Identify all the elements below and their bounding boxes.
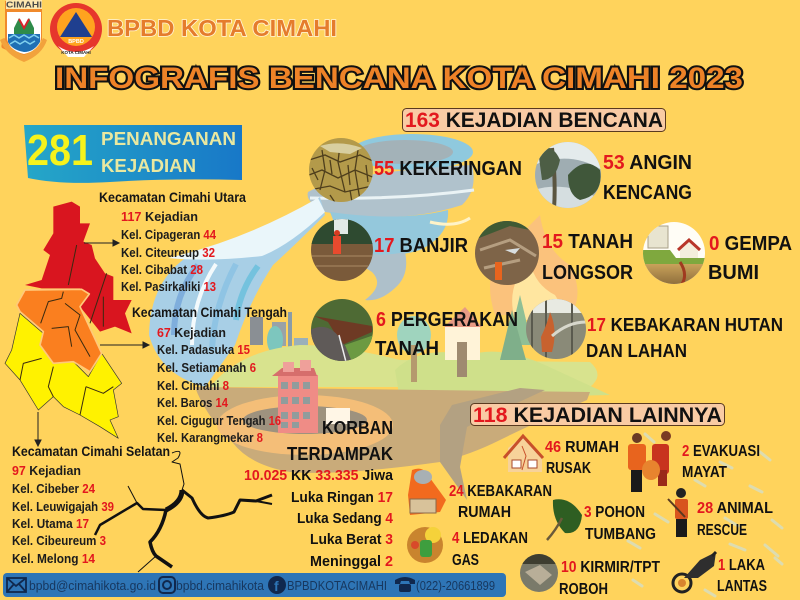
contact: phone: (022)-20661899: [416, 578, 495, 593]
label: gempa bumi: BUMI: [708, 262, 759, 284]
logo: BPBD: [50, 3, 102, 57]
text block: Kecamatan Cimahi Tengah: Kel. Baros 14: [157, 396, 228, 410]
panel: 281 penanganan kejadian: KEJADIAN: [101, 156, 196, 176]
label: ledakan gas: GAS: [452, 552, 479, 569]
district: Cimahi Selatan: [5, 313, 122, 438]
label: tanah longsor: 15 TANAH: [542, 231, 633, 253]
contact: email: bpbd@cimahikota.go.id: [29, 578, 156, 593]
label: ledakan gas: 4 LEDAKAN: [452, 530, 528, 547]
text block: Kecamatan Cimahi Tengah: 67 Kejadian: [157, 326, 226, 340]
photo: kebakaran hutan: [526, 299, 586, 359]
label: rumah rusak: 46 RUMAH: [545, 439, 619, 456]
label: tanah longsor: [542, 231, 633, 284]
logo: Kota Cimahi: CIMAHI: [6, 0, 42, 10]
label: kirmir TPT roboh: [559, 559, 660, 598]
background illustration: city and hills: [210, 307, 610, 400]
label: animal rescue: RESCUE: [697, 522, 747, 539]
district: Cimahi Tengah: [17, 289, 102, 372]
label: kebakaran hutan dan lahan: [586, 315, 783, 361]
label: rumah rusak: RUSAK: [546, 460, 592, 477]
panel: 281 penanganan kejadian: [24, 125, 242, 183]
heading: 163 kejadian bencana: 163 KEJADIAN BENCANA: [405, 109, 663, 132]
label: angin kencang: 53 ANGIN: [603, 152, 692, 174]
text block: Kecamatan Cimahi Tengah: Kecamatan Cimahi Tengah: [132, 305, 287, 320]
text block: Kecamatan Cimahi Tengah: Kel. Cigugur Tengah 16: [157, 414, 281, 428]
logo: BPBD: BPBD: [68, 39, 84, 45]
icon: instagram: [159, 577, 175, 593]
photo: kekeringan: [309, 138, 373, 202]
label: tanah longsor: LONGSOR: [542, 262, 633, 284]
logo: BPBD: KOTA CIMAHI: [61, 50, 91, 55]
icon: phone: [395, 577, 415, 592]
background illustration: forest fire: [490, 215, 578, 360]
background illustration: ground and building: [195, 387, 590, 500]
text block: korban terdampak: 10.025 KK 33.335 Jiwa: [244, 468, 394, 484]
photo: banjir: [310, 218, 374, 282]
footer contact bar: [3, 573, 506, 597]
label: banjir: 17 BANJIR: [374, 235, 469, 257]
icon: evakuasi mayat: [628, 431, 671, 492]
label: pohon tumbang: TUMBANG: [585, 526, 656, 543]
icon: facebook: f: [274, 578, 279, 594]
text block: korban terdampak: Luka Ringan 17: [291, 490, 393, 506]
text block: Kecamatan Cimahi Selatan: Kecamatan Cimahi Selatan: [12, 444, 170, 459]
heading: 118 kejadian lainnya: 118 KEJADIAN LAINNYA: [473, 404, 722, 427]
text block: Kecamatan Cimahi Tengah: [132, 305, 287, 445]
icon: kebakaran rumah: [408, 469, 446, 515]
photo: angin kencang: [534, 141, 602, 209]
label: laka lantas: LANTAS: [717, 578, 767, 595]
label: pergerakan tanah: TANAH: [375, 338, 439, 360]
photo: pergerakan tanah: [310, 298, 374, 362]
label: evakuasi mayat: 2 EVAKUASI: [682, 443, 760, 460]
text block: Kecamatan Cimahi Selatan: [12, 444, 170, 566]
icon: email: [7, 578, 26, 592]
label: kebakaran rumah: [449, 483, 552, 521]
label: kirmir TPT roboh: ROBOH: [559, 581, 608, 598]
photo: tanah longsor: [474, 220, 540, 286]
label: pohon tumbang: 3 POHON: [584, 504, 645, 521]
contact: facebook: BPBDKOTACIMAHI: [287, 578, 387, 593]
label: kirmir TPT roboh: 10 KIRMIR/TPT: [561, 559, 660, 576]
title: INFOGRAFIS BENCANA KOTA CIMAHI 2023: [55, 62, 743, 95]
icon: animal rescue: [668, 488, 688, 537]
label: evakuasi mayat: [682, 443, 760, 481]
label: kebakaran rumah: 24 KEBAKARAN: [449, 483, 552, 500]
icon: laka lantas: [673, 552, 716, 592]
text block: Kecamatan Cimahi Selatan: Kel. Utama 17: [12, 517, 89, 531]
text block: korban terdampak: [244, 418, 394, 570]
text block: Kecamatan Cimahi Utara: [99, 190, 246, 294]
label: angin kencang: [603, 152, 692, 204]
label: laka lantas: [717, 557, 767, 595]
icon: kirmir TPT roboh: [520, 554, 558, 592]
earth crack: [95, 451, 272, 572]
background illustration: wave: [149, 197, 325, 387]
label: kebakaran hutan dan lahan: 17 KEBAKARAN HUTAN: [587, 315, 783, 335]
text block: Kecamatan Cimahi Tengah: Kel. Karangmekar 8: [157, 431, 263, 445]
text block: korban terdampak: Luka Berat 3: [310, 532, 393, 548]
total number: 281: [27, 126, 93, 175]
logo: Kota Cimahi: [0, 0, 47, 62]
background illustration: tornado: [308, 134, 474, 300]
text block: Kecamatan Cimahi Selatan: Kel. Melong 14: [12, 552, 95, 566]
text block: Kecamatan Cimahi Utara: Kel. Cibabat 28: [121, 263, 203, 277]
label: animal rescue: 28 ANIMAL: [697, 500, 773, 517]
text block: Kecamatan Cimahi Selatan: 97 Kejadian: [12, 464, 81, 478]
label: laka lantas: 1 LAKA: [718, 557, 765, 574]
map of Cimahi: [5, 202, 132, 438]
text block: Kecamatan Cimahi Selatan: Kel. Leuwigajah 39: [12, 500, 114, 514]
icon: facebook: [268, 576, 286, 594]
icon: rumah rusak: [504, 436, 543, 472]
arrows: [35, 240, 149, 446]
label: pohon tumbang: [584, 504, 656, 543]
text block: Kecamatan Cimahi Utara: Kecamatan Cimahi Utara: [99, 190, 246, 205]
icon: ledakan gas: [407, 527, 443, 563]
scattered debris streaks: [628, 434, 782, 596]
heading: BPBD Kota Cimahi: BPBD KOTA CIMAHI: [107, 15, 337, 41]
text block: korban terdampak: Meninggal 2: [310, 554, 393, 570]
label: rumah rusak: [545, 439, 619, 477]
label: gempa bumi: 0 GEMPA: [709, 233, 792, 255]
label: pergerakan tanah: [375, 309, 518, 360]
icon: pohon tumbang: [547, 499, 582, 540]
photo: gempa bumi: [642, 221, 706, 286]
text block: Kecamatan Cimahi Tengah: Kel. Setiamanah 6: [157, 361, 256, 375]
text block: Kecamatan Cimahi Tengah: Kel. Cimahi 8: [157, 379, 229, 393]
label: pergerakan tanah: 6 PERGERAKAN: [376, 309, 518, 331]
text block: Kecamatan Cimahi Utara: Kel. Citeureup 32: [121, 246, 215, 260]
text block: korban terdampak: Luka Sedang 4: [297, 511, 393, 527]
label: kebakaran hutan dan lahan: DAN LAHAN: [586, 341, 687, 361]
label: ledakan gas: [452, 530, 528, 569]
label: gempa bumi: [708, 233, 792, 284]
banner label: PENANGANAN: [101, 129, 236, 149]
label: animal rescue: [697, 500, 773, 539]
label: angin kencang: KENCANG: [603, 182, 692, 204]
label: kebakaran rumah: RUMAH: [458, 504, 511, 521]
background illustration: pink building: [272, 360, 318, 433]
contact: instagram: bpbd.cimahikota: [176, 578, 265, 593]
text block: Kecamatan Cimahi Selatan: Kel. Cibeber 24: [12, 482, 95, 496]
text block: Kecamatan Cimahi Utara: Kel. Pasirkaliki 13: [121, 280, 216, 294]
text block: Kecamatan Cimahi Utara: Kel. Cipageran 44: [121, 228, 216, 242]
label: evakuasi mayat: MAYAT: [682, 464, 727, 481]
text block: Kecamatan Cimahi Selatan: Kel. Cibeureum 3: [12, 534, 106, 548]
label: kekeringan: 55 KEKERINGAN: [374, 158, 522, 180]
text block: Kecamatan Cimahi Utara: 117 Kejadian: [121, 210, 198, 224]
text block: Kecamatan Cimahi Tengah: Kel. Padasuka 15: [157, 343, 250, 357]
district: Cimahi Utara: [25, 202, 132, 333]
text block: korban terdampak: TERDAMPAK: [287, 444, 393, 464]
text block: korban terdampak: KORBAN: [322, 418, 393, 438]
